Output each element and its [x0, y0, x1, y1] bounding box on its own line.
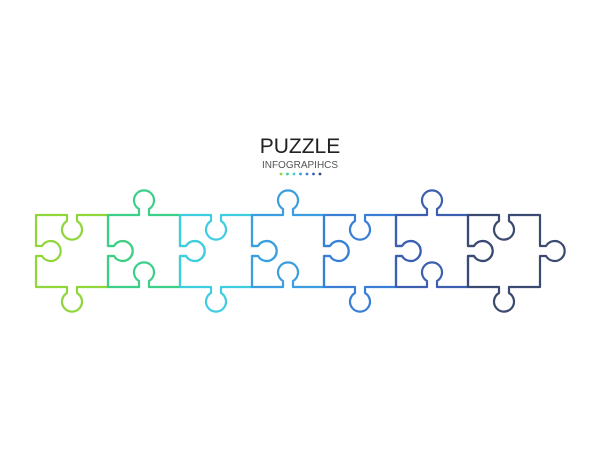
puzzle pieces: [36, 190, 565, 312]
title: [260, 135, 340, 171]
piece 7: [468, 215, 565, 312]
piece 3: [180, 215, 277, 312]
piece 1: [36, 215, 133, 312]
piece 6: [396, 190, 493, 287]
piece 5: [324, 215, 421, 312]
title: PUZZLE: [260, 135, 340, 158]
title: INFOGRAPIHCS: [262, 160, 338, 171]
color dots: [280, 173, 321, 175]
piece 4: [252, 190, 349, 287]
piece 2: [108, 190, 205, 287]
